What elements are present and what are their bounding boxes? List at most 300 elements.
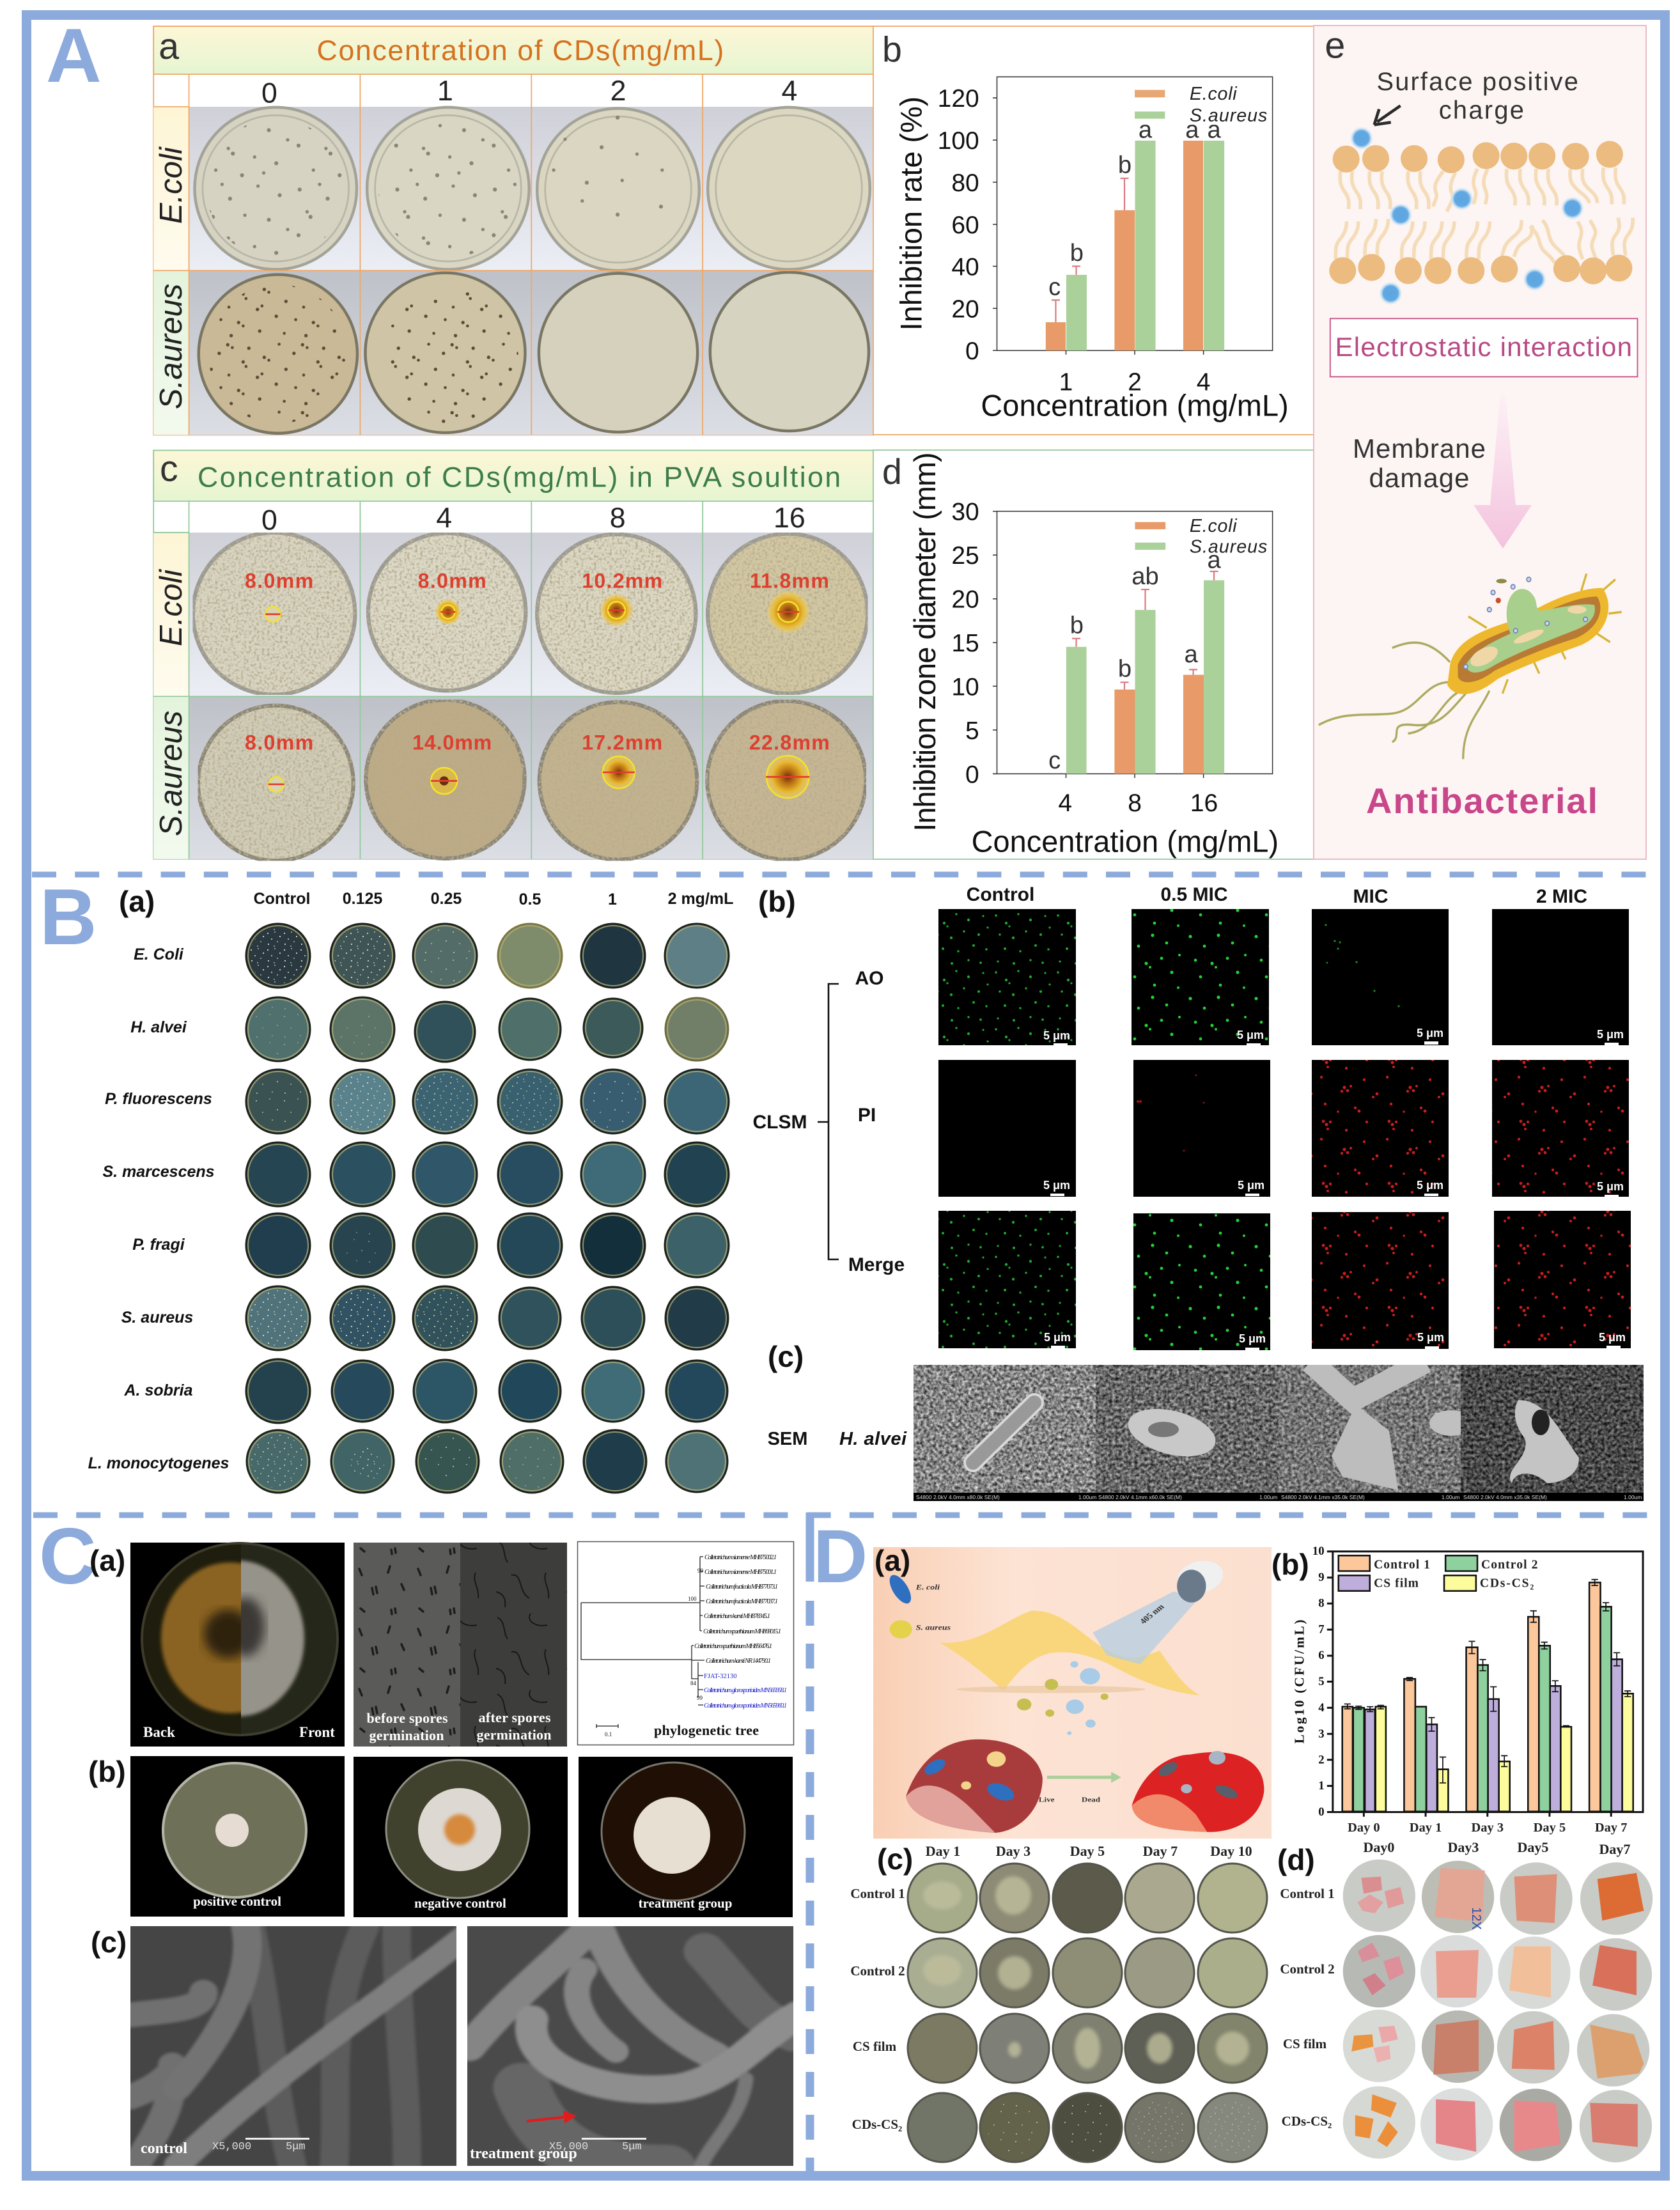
legend: Control 2 (1481, 1558, 1538, 1571)
panel A-b frame (873, 26, 1314, 435)
concentration headers: 4 (436, 502, 452, 534)
label surface positive charge: Surface positive (1377, 68, 1578, 96)
panel label (b): (b) (1272, 1548, 1309, 1581)
panel letter a: a (159, 26, 179, 67)
legend (1135, 516, 1267, 557)
live meat (906, 1739, 1043, 1833)
PI control: 5 μm (1043, 1179, 1070, 1192)
significance letters: a (1139, 116, 1153, 144)
panel label (b): (b) (758, 885, 796, 918)
section letter D: D (813, 1514, 867, 1599)
group labels: CDs-CS₂ (1282, 2113, 1332, 2129)
treatment labels: treatment group (470, 2145, 577, 2162)
live dead labels: Live (1039, 1796, 1054, 1803)
legend: Control 1 (1374, 1558, 1430, 1571)
zone diameter values: 14.0mm (412, 731, 492, 754)
species labels: A. sobria (124, 1381, 193, 1399)
antibacterial label: Antibacterial (1366, 781, 1598, 821)
illustration (885, 1555, 1264, 1833)
phylogenetic tree: Colletotrichum fructicola MH877037.1 (706, 1598, 778, 1605)
y tick labels: 20 (951, 295, 979, 323)
concentration headers (261, 75, 797, 109)
concentration headers: 2 mg/mL (668, 890, 733, 908)
x axis title: Concentration (mg/mL) (972, 825, 1279, 859)
AO MIC (1312, 909, 1449, 1045)
positive control plate (130, 1756, 345, 1917)
PI 0.5 MIC (1133, 1060, 1270, 1197)
bracket (818, 984, 839, 1259)
treatment labels: X5,000 (549, 2141, 588, 2153)
panel label (c): (c) (91, 1926, 127, 1959)
negative control plate: negative control (414, 1895, 506, 1911)
inner rims (203, 115, 862, 424)
treatment group plate: treatment group (639, 1895, 732, 1911)
panel letter d: d (882, 452, 902, 492)
concentration headers: 1 (437, 75, 453, 107)
dish inner rims (248, 926, 727, 1491)
phylogenetic tree: 99 (697, 1695, 703, 1701)
y tick labels (951, 499, 979, 788)
x tick labels: 4 (1197, 368, 1210, 396)
stain labels: CLSM (753, 1112, 807, 1133)
SEM scale strip: S4800 2.0kV 4.0mm x35.0k SE(M) (1463, 1494, 1547, 1500)
row labels: SEM (768, 1429, 807, 1449)
control labels: control (141, 2140, 187, 2157)
row labels (768, 1429, 907, 1449)
day headers: Day 5 (1070, 1843, 1105, 1859)
group labels: Control 1 (1280, 1886, 1335, 1901)
species labels: P. fluorescens (105, 1090, 212, 1108)
control SEM (130, 1926, 470, 2170)
dead meat (1132, 1751, 1264, 1832)
panel D-b: Log10 CFU bar chart (1272, 1545, 1643, 1835)
phylogenetic tree: 100 (688, 1596, 697, 1602)
species labels (88, 945, 229, 1472)
concentration headers: 8 (610, 502, 626, 534)
image cells (153, 533, 873, 859)
legend: CS film (1374, 1577, 1419, 1591)
lipid tails (1335, 167, 1633, 263)
y tick labels: 3 (1318, 1727, 1325, 1741)
live dead labels (1039, 1796, 1100, 1803)
phylogenetic tree (578, 1542, 794, 1745)
zone diameter values: 22.8mm (749, 731, 830, 754)
panel A-d frame (873, 450, 1314, 859)
section letter A: A (46, 13, 102, 98)
panel letter e: e (1325, 26, 1345, 66)
x tick labels: 8 (1128, 790, 1142, 817)
zone diameter arrows (265, 611, 809, 784)
day headers: Day 10 (1210, 1843, 1252, 1859)
PI control (938, 1060, 1076, 1197)
y tick labels: 5 (965, 717, 979, 745)
wavelength label: 405 nm (1137, 1602, 1167, 1626)
legend: S.aureus (1190, 536, 1267, 557)
section divider A/B (32, 872, 1660, 877)
panel A-a: colony plates (153, 26, 873, 435)
concentration headers: 0.5 (519, 891, 541, 908)
lamp (1171, 1555, 1230, 1603)
treatment SEM (467, 1926, 798, 2170)
panel B-a: plates grid (88, 885, 733, 1493)
cell grid (153, 501, 873, 859)
y axis title: Inhibition zone diameter (mm) (908, 452, 942, 832)
concentration headers (261, 502, 805, 536)
Merge 0.5 MIC: 5 μm (1239, 1332, 1266, 1345)
significance letters: a (1207, 116, 1221, 144)
y tick labels: 80 (951, 169, 979, 197)
panel label (c): (c) (877, 1842, 913, 1876)
colony back and front photo: Back (143, 1724, 175, 1740)
y tick labels: 7 (1318, 1623, 1325, 1637)
petri dishes (246, 924, 729, 1493)
y tick labels: 10 (1312, 1545, 1325, 1558)
panel label (d): (d) (1277, 1843, 1315, 1876)
AO 2 MIC: 5 μm (1597, 1028, 1624, 1041)
legend: CDs-CS₂ (1480, 1577, 1534, 1591)
y tick labels: 0 (1318, 1805, 1325, 1819)
legend: E.coli (1190, 84, 1237, 104)
film shadow (956, 1686, 1146, 1693)
label membrane damage (1353, 433, 1486, 493)
treatment group plate (579, 1757, 793, 1917)
phylogenetic tree: phylogenetic tree (654, 1722, 759, 1738)
group labels: CS film (1283, 2036, 1327, 2051)
legend: S.aureus (1190, 105, 1267, 126)
panel C-a: fungus characterization (89, 1542, 794, 1747)
y tick labels: 0 (965, 338, 979, 365)
group labels: Control 2 (850, 1963, 905, 1979)
phylogenetic tree: Colletotrichum gloeosporioides MN565958.1 (704, 1687, 787, 1694)
treatment labels (470, 2138, 646, 2162)
meat row CS film (1351, 2019, 1644, 2078)
panel A-b: inhibition rate bar chart (882, 29, 1289, 423)
negative control plate (354, 1757, 568, 1917)
panel B-b: CLSM images (753, 884, 1631, 1350)
legend: E.coli (1190, 516, 1237, 536)
x tick labels: Day 5 (1534, 1821, 1566, 1835)
image cells (153, 107, 873, 435)
panel label (c): (c) (768, 1340, 804, 1373)
phylogenetic tree: 84 (690, 1680, 697, 1686)
panel A-c: inhibition zone plates (153, 449, 873, 860)
y tick labels: 5 (1318, 1675, 1325, 1688)
bacteria key: S. aureus (916, 1624, 951, 1631)
SEM scale strip: S4800 2.0kV 4.0mm x80.0k SE(M) (916, 1494, 1000, 1500)
SEM image 1 (914, 1365, 1096, 1493)
concentration headers: 1 (608, 891, 617, 908)
SEM scale strip (914, 1493, 1644, 1501)
E. coli agar plates (193, 533, 867, 695)
panel label (a): (a) (119, 885, 155, 918)
legend (1135, 84, 1267, 126)
phylogenetic tree: Colletotrichum spaethianum MH868015.1 (703, 1628, 781, 1635)
column headers (967, 884, 1587, 907)
row labels: S.aureus (154, 284, 189, 409)
species labels: P. fragi (132, 1236, 185, 1254)
x tick labels: 1 (1059, 368, 1073, 396)
zone diameter values: 17.2mm (582, 731, 662, 754)
phylogenetic tree: Colletotrichum spaethianum MH856476.1 (694, 1643, 772, 1650)
zone diameter values: 10.2mm (582, 570, 662, 593)
x tick labels: Day 3 (1472, 1821, 1504, 1835)
panel letter c: c (160, 449, 178, 490)
concentration headers: 2 (611, 75, 626, 107)
x tick labels (1348, 1821, 1627, 1835)
spore germination micrographs (354, 1543, 567, 1747)
AO control: 5 μm (1043, 1029, 1070, 1042)
Merge MIC: 5 μm (1417, 1331, 1444, 1344)
phylogenetic tree: FJAT-32130 (704, 1673, 737, 1680)
SEM image 3 (1279, 1362, 1473, 1493)
colony speckle (250, 928, 641, 1488)
species labels: E. Coli (134, 945, 184, 963)
AO MIC: 5 μm (1417, 1027, 1443, 1039)
significance letters: a (1184, 641, 1198, 668)
bacteria key (885, 1573, 951, 1638)
significance letters: b (1118, 152, 1132, 179)
S. aureus agar plates (198, 700, 866, 860)
concentration headers: 16 (774, 502, 805, 534)
phylogenetic tree: Colletotrichum gloeosporioides MN565960.1 (704, 1702, 787, 1709)
section letter B: B (40, 873, 97, 961)
x axis title: Concentration (mg/mL) (981, 389, 1289, 423)
stain labels (753, 968, 905, 1275)
spore germination micrographs: germination (477, 1727, 551, 1743)
S. aureus plates (199, 272, 869, 433)
control labels: X5,000 (212, 2141, 251, 2153)
Merge 0.5 MIC (1133, 1213, 1270, 1350)
SEM scale strip: 1.00um (1624, 1494, 1642, 1500)
PI 2 MIC (1492, 1060, 1629, 1197)
SEM scale strip: 1.00um (1078, 1494, 1096, 1500)
x tick labels (1058, 790, 1218, 817)
panel D-d: meat photos (1277, 1839, 1653, 2162)
plates (908, 1864, 1267, 2162)
y tick labels: 10 (951, 673, 979, 701)
y axis title: Log10 (CFU/mL) (1292, 1620, 1307, 1743)
y tick labels: 0 (965, 761, 979, 788)
day headers (1364, 1839, 1630, 1857)
species labels: H. alvei (130, 1018, 187, 1036)
y tick labels: 6 (1318, 1649, 1325, 1662)
y tick labels: 9 (1318, 1571, 1325, 1584)
y tick labels (938, 85, 979, 365)
red arrow (527, 2116, 574, 2121)
concentration headers (254, 890, 733, 908)
species labels: S. marcescens (102, 1163, 215, 1181)
significance letters: a (1185, 116, 1199, 144)
species labels: S. aureus (121, 1309, 193, 1327)
green bars (1066, 141, 1224, 350)
yellow film (939, 1610, 1200, 1695)
significance letters: c (1048, 747, 1061, 774)
panel letter b: b (882, 29, 902, 69)
day headers: Day3 (1448, 1839, 1479, 1855)
panel label (b): (b) (88, 1755, 126, 1788)
Merge control: 5 μm (1044, 1331, 1071, 1344)
y tick labels: 25 (951, 542, 979, 570)
significance letters (1048, 547, 1221, 774)
group labels (1280, 1886, 1335, 2129)
lipid heads (1329, 141, 1632, 284)
label membrane damage: damage (1369, 463, 1469, 493)
significance letters: b (1070, 239, 1084, 267)
panel A-e: mechanism (1314, 26, 1646, 859)
live to dead arrow (1047, 1775, 1112, 1780)
significance letters: a (1207, 547, 1221, 574)
meat row CDs-CS2 (1355, 2094, 1638, 2152)
meat row control 2 (1358, 1943, 1637, 1998)
stain labels: AO (855, 968, 883, 989)
x tick labels: 4 (1058, 790, 1072, 817)
label membrane damage: Membrane (1353, 433, 1486, 463)
positive control plate: positive control (193, 1894, 281, 1909)
error bars (1072, 572, 1218, 690)
y tick labels: 20 (951, 586, 979, 614)
light beam (1093, 1592, 1199, 1665)
colony back and front photo: Front (299, 1724, 335, 1740)
pink arrow (1474, 394, 1532, 549)
day headers (926, 1843, 1252, 1859)
error bars (1344, 1580, 1631, 1783)
significance letters: b (1070, 612, 1084, 639)
concentration headers: 0.125 (343, 890, 382, 908)
x tick labels: 16 (1190, 790, 1218, 817)
y tick labels: 1 (1318, 1779, 1325, 1793)
group labels: CDs-CS₂ (852, 2117, 902, 2132)
bars (1342, 1582, 1633, 1812)
handwritten plate mark: 12X (1469, 1907, 1483, 1930)
phylogenetic tree: 99 (697, 1568, 703, 1574)
y tick labels: 60 (951, 212, 979, 239)
orange bars (1046, 141, 1203, 350)
plot frame (1327, 1552, 1643, 1817)
x tick labels: Day 7 (1595, 1821, 1627, 1835)
day headers: Day5 (1518, 1839, 1548, 1855)
arrow to particle (1374, 105, 1401, 125)
significance letters: b (1118, 655, 1132, 683)
legend (1339, 1555, 1538, 1591)
zone diameter values: 8.0mm (418, 570, 486, 593)
phylogenetic tree: Colletotrichum fructicola MH877073.1 (706, 1584, 778, 1591)
day headers: Day0 (1364, 1839, 1394, 1855)
row labels (154, 568, 189, 836)
x tick labels: 2 (1128, 368, 1142, 396)
zone diameter values: 8.0mm (245, 731, 313, 754)
panel label (a): (a) (89, 1544, 125, 1577)
SEM image 2 (1096, 1365, 1279, 1493)
colony back and front photo (130, 1543, 345, 1747)
meat plates (1343, 1860, 1653, 2162)
column headers: MIC (1353, 886, 1388, 907)
orange bars (1114, 675, 1204, 774)
PI MIC (1312, 1060, 1449, 1197)
error bars (1052, 178, 1129, 322)
section divider C/D (805, 1513, 814, 2172)
column headers: 2 MIC (1536, 886, 1587, 907)
row labels: S.aureus (154, 711, 189, 836)
bacteria key: E. coli (915, 1584, 940, 1591)
panel A-d: inhibition zone bar chart (882, 452, 1279, 859)
significance letters (1048, 116, 1221, 301)
column headers: Control (967, 884, 1034, 905)
PI 2 MIC: 5 μm (1597, 1180, 1624, 1193)
concentration headers: 0.25 (431, 890, 462, 908)
significance letters: c (1048, 274, 1061, 301)
y tick labels: 120 (938, 85, 979, 113)
membrane and labels: charge (1439, 97, 1524, 125)
AO 0.5 MIC (1132, 909, 1269, 1045)
y tick labels: 40 (951, 253, 979, 281)
plot box and ticks (993, 77, 1273, 355)
y tick labels: 2 (1318, 1753, 1325, 1766)
meat row control 1 (1358, 1868, 1644, 1923)
panel C-b: antifungal plates (88, 1755, 793, 1917)
AO control (938, 909, 1076, 1045)
panel D-c: culture plates over storage (850, 1842, 1267, 2162)
significance letters: ab (1132, 563, 1159, 590)
plot box and ticks (993, 511, 1273, 778)
concentration headers: Control (254, 890, 310, 908)
SEM scale strip: S4800 2.0kV 4.1mm x35.0k SE(M) (1281, 1494, 1365, 1500)
species labels: L. monocytogenes (88, 1454, 229, 1472)
y axis title: Inhibition rate (%) (895, 97, 928, 331)
panel C-c: hyphae SEM (91, 1926, 798, 2170)
stain labels: Merge (848, 1254, 905, 1275)
y tick labels: 30 (951, 499, 979, 526)
electrostatic interaction box (1330, 318, 1637, 377)
day headers: Day 3 (996, 1843, 1031, 1859)
SEM scale strip: 1.00um (1259, 1494, 1277, 1500)
day headers: Day 1 (926, 1843, 960, 1859)
S. aureus colonies (208, 284, 518, 424)
group labels: CS film (853, 2039, 897, 2054)
phylogenetic tree: Colletotrichum karsti MH878345.1 (704, 1613, 770, 1620)
phylogenetic tree: 0.1 (605, 1731, 612, 1738)
phylogenetic tree: Colletotrichum siamense MH875002.1 (704, 1554, 777, 1561)
spore germination micrographs: germination (369, 1727, 444, 1743)
carbon dot particles (1349, 126, 1585, 306)
x tick labels: Day 0 (1348, 1821, 1380, 1835)
E. coli plates (194, 107, 870, 270)
day headers: Day7 (1599, 1841, 1630, 1857)
SEM image 4 (1461, 1365, 1644, 1493)
SEM scale strip: S4800 2.0kV 4.1mm x60.0k SE(M) (1098, 1494, 1182, 1500)
section divider B/C-D (33, 1513, 1660, 1518)
group labels: Control 2 (1280, 1961, 1335, 1977)
concentration headers: 4 (781, 75, 797, 107)
concentration headers: 0 (261, 78, 277, 109)
PI 0.5 MIC: 5 μm (1238, 1179, 1264, 1192)
concentration headers: 0 (261, 505, 277, 536)
row labels: H. alvei (839, 1429, 907, 1449)
Merge 2 MIC: 5 μm (1599, 1331, 1626, 1344)
control labels (141, 2138, 309, 2157)
Merge MIC (1312, 1212, 1449, 1349)
row labels: E.coli (154, 146, 189, 224)
panel c title: Concentration of CDs(mg/mL) in PVA soultion (198, 462, 841, 494)
y tick labels (1312, 1545, 1325, 1819)
spore germination micrographs: before spores (367, 1710, 448, 1726)
phylogenetic tree: Colletotrichum siamense MH875001.1 (704, 1569, 777, 1576)
electrostatic interaction box: Electrostatic interaction (1335, 332, 1632, 362)
cell grid (153, 74, 873, 435)
panel label (a): (a) (875, 1544, 910, 1577)
ROS bubbles and spheres (1017, 1661, 1108, 1735)
x tick labels (1059, 368, 1210, 396)
spore germination micrographs: after spores (478, 1709, 551, 1725)
